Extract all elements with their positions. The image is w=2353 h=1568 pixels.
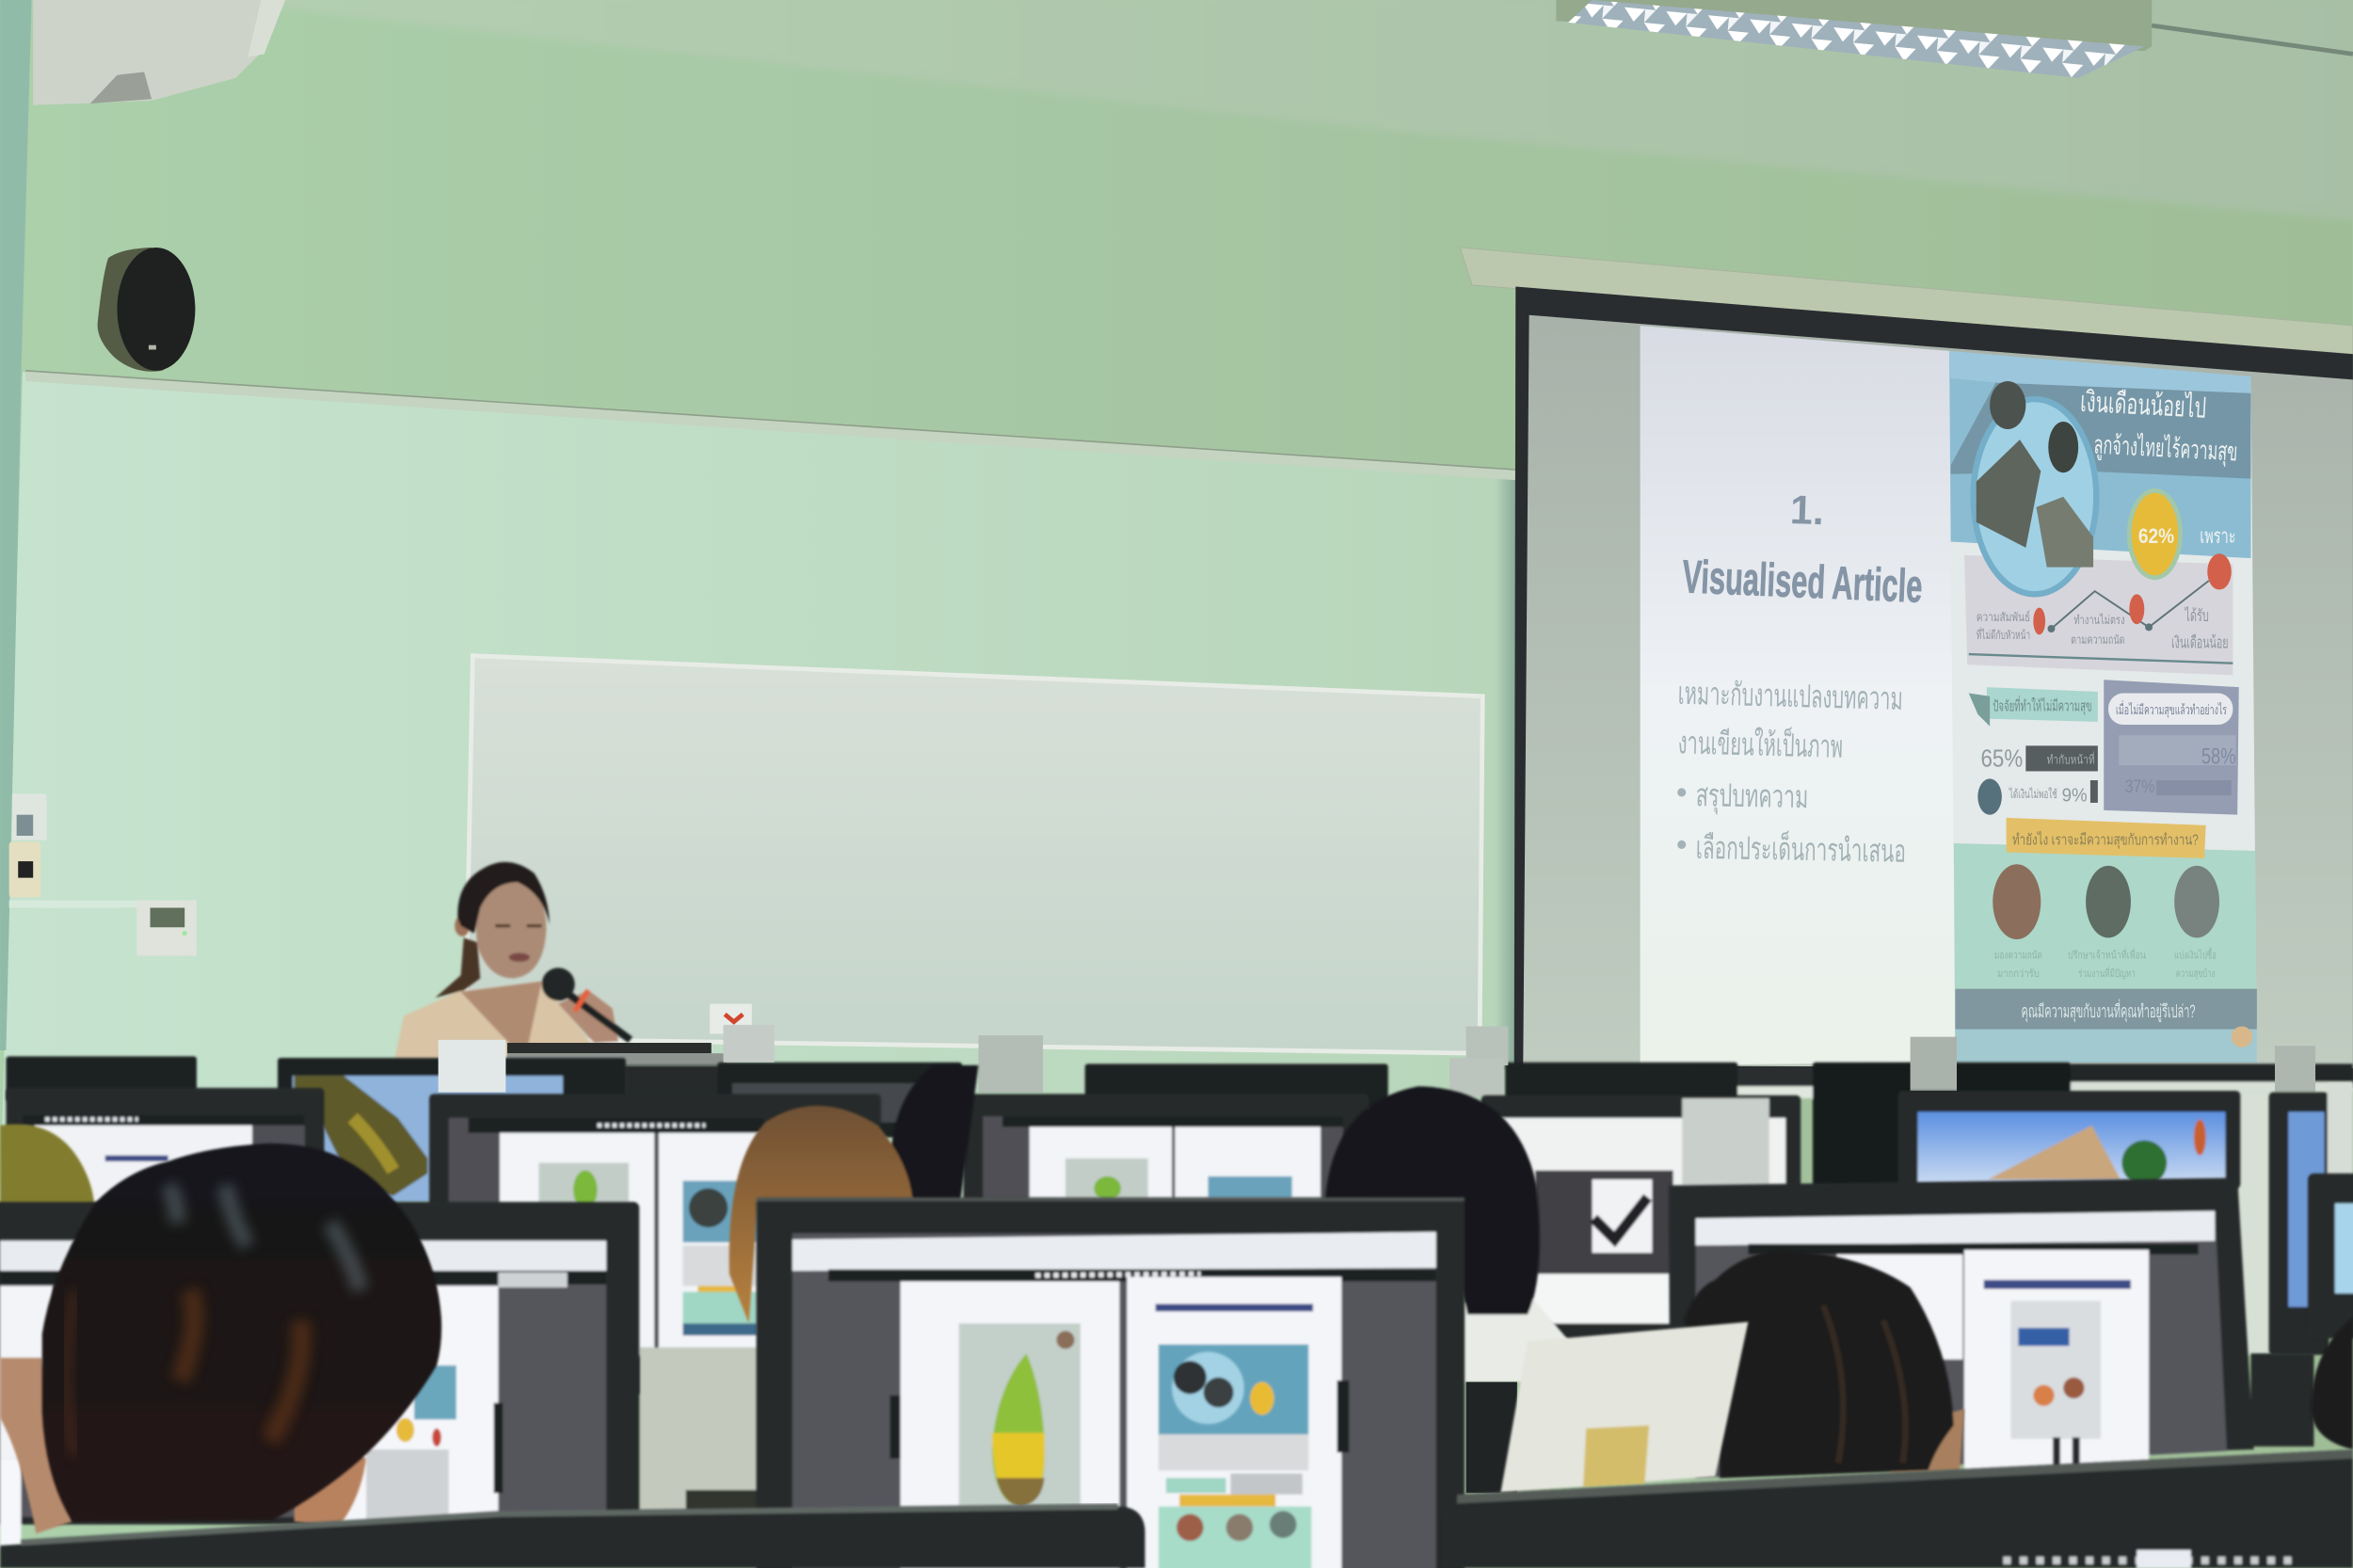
factors panel: ทำกับหน้าที่ [2047,751,2095,766]
ranking line chart: ที่ไม่ดีกับหัวหน้า [1977,627,2030,642]
desktop wallpaper [293,1076,563,1202]
what happens panel: เมื่อไม่มีความสุขแล้วทำอย่างไร [2116,700,2227,718]
ranking line chart: ความสัมพันธ์ [1977,610,2030,624]
right edge front monitor [2250,1174,2353,1447]
wall controls [9,793,197,956]
right edge monitor [2269,1083,2353,1355]
arm at far left [0,1358,72,1533]
bottom row monitor, left [0,1507,1145,1568]
front right woman [1684,1250,1964,1478]
slide body text: • [1676,828,1688,863]
factors panel [1969,687,2098,815]
dark chair back [1466,1382,1517,1493]
factors panel: ได้เงินไม่พอใช้ [2009,787,2057,801]
left monitor [6,1088,324,1215]
infographic on monitor [1159,1344,1311,1568]
air conditioner [33,0,285,105]
slide body text [1676,677,1906,870]
back row monitors [6,1056,2353,1355]
what happens panel: 37% [2125,777,2154,797]
person at right edge [2311,1318,2353,1449]
front row monitors [0,1174,2353,1568]
three circular icons: ร่วมงานที่มีปัญหา [2078,966,2136,980]
infographic on slide [1949,351,2257,1063]
banana poster [959,1323,1080,1507]
yellow-tinted hair, far left [0,1124,95,1208]
dark haired person behind monitor [890,1065,979,1200]
projector screen housing [1460,248,2353,354]
monitor with graphic design page [1481,1096,1801,1343]
ranking line chart: ตามความถนัด [2071,632,2125,647]
back row people [0,1065,1585,1512]
62 percent badge: เพราะ [2200,524,2236,548]
slide body text: • [1676,776,1688,810]
62 percent badge [2129,490,2236,578]
ranking line chart [1977,553,2232,652]
dark haired woman, white shirt [1325,1086,1585,1382]
factors panel: 9% [2062,784,2088,806]
front right monitor [1669,1177,2254,1478]
factors panel: ปัจจัยที่ทำให้ไม่มีความสุข [1993,696,2091,716]
three circular icons [1993,864,2219,980]
yellow question banner: ทำยังไง เราจะมีความสุขกับการทำงาน? [2012,831,2199,850]
bottom row monitor, right [1444,1449,2353,1568]
monitor with university wallpaper [1898,1091,2240,1189]
62 percent badge: 62% [2138,524,2174,548]
slide number: 1. [1789,488,1825,534]
ranking line chart: เงินเดือนน้อย [2171,633,2229,652]
factors panel: 65% [1981,746,2023,773]
podium items [507,1004,752,1065]
slide [1641,326,1955,1065]
infographic logo [2232,1026,2252,1048]
slide body text: เลือกประเด็นการนำเสนอ [1695,828,1906,870]
slide body text: เหมาะกับงานแปลงบทความ [1677,677,1903,717]
three circular icons: ความสุขบ้าง [2176,968,2215,980]
infographic title: เงินเดือนน้อยไป [2079,385,2207,424]
three circular icons: มองความถนัด [1994,951,2042,962]
monitor, centre [964,1094,1369,1214]
three circular icons: แบ่งเงินไปซื้อ [2174,948,2217,962]
microphone [542,968,631,1043]
what happens panel [2104,680,2239,815]
three circular icons: มากกว่ารับ [1997,968,2040,980]
ceiling light [1556,0,2353,78]
illustrated couple [1974,381,2096,594]
yellow question banner [2007,818,2206,858]
projector screen [1514,287,2353,1088]
slide body text: งานเขียนให้เป็นภาพ [1677,723,1844,765]
front left monitor [0,1202,639,1548]
front centre monitor [757,1197,1465,1568]
speaker [98,248,195,372]
slide heading: Visualised Article [1681,551,1924,613]
three circular icons: ปรึกษาเจ้าหน้าที่เพื่อน [2068,948,2146,962]
brown haired woman [639,1106,912,1512]
paper card [1500,1322,1748,1493]
ranking line chart: ได้รับ [2184,606,2209,625]
infographic footer question: คุณมีความสุขกับงานที่คุณทำอยู่รึเปล่า? [2022,999,2196,1023]
second row monitors [6,1083,2353,1394]
slide body text: สรุปบทความ [1695,778,1809,816]
infographic subtitle: ลูกจ้างไทยไร้ความสุข [2093,430,2238,468]
name cards [439,1025,2315,1096]
presenter [394,862,631,1060]
what happens panel: 58% [2201,744,2236,769]
whiteboard [465,656,1482,1053]
ranking line chart: ทำงานไม่ตรง [2073,613,2125,627]
monitor with infographic, centre left [429,1094,881,1394]
front left person hair [42,1144,441,1528]
